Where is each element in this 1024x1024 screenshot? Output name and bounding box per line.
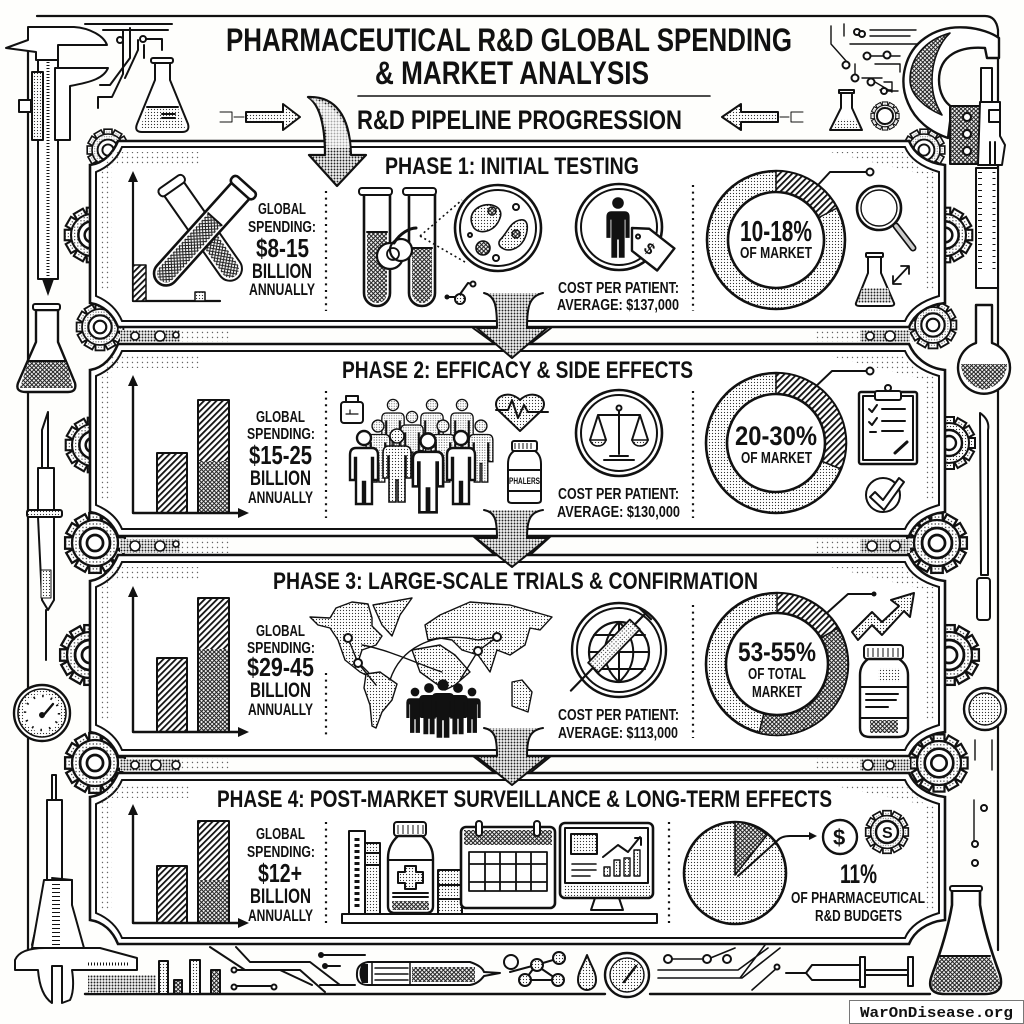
dotted bands between panels [120,329,915,771]
title [226,22,792,91]
arrow: small left [722,104,803,130]
text: phase 2 global spending [247,409,315,507]
text: phase 4 global spending: GLOBAL [256,826,305,843]
text: phase 1 cost per patient: AVERAGE: $137,000 [557,297,679,314]
watermark [850,1000,1024,1024]
icon: gear with S [866,811,908,853]
icon: magnifying glass [857,186,913,248]
icon: molecule [444,282,476,304]
text: phase 1 global spending: SPENDING: [248,219,316,236]
panel: Phase 2 [90,344,945,536]
bottom strip: pen [357,962,500,985]
icon: flask top left [136,58,188,132]
bottom strip: circuit lines [210,947,365,992]
panel: Phase 3 [90,555,945,756]
icon: medicine bottle: PHALERS [509,476,540,487]
icon: small pill bottle [341,396,363,423]
icon: books [349,831,380,915]
chart: phase 2 donut 20-30%: OF MARKET [741,450,812,467]
text: phase 4 global spending: $12+ [258,858,302,888]
text: phase 3 global spending [247,623,315,719]
shelf [342,914,657,923]
icon: syringe left [27,412,62,660]
text: phase 4 global spending: SPENDING: [247,844,315,861]
icon: group of people [350,399,493,512]
chart: phase 3 donut 53-55% [706,592,876,735]
text: phase 2 cost per patient: COST PER PATIENT: [558,486,679,503]
icon: small flask top right [830,90,862,130]
chart: phase 1 axes and crossed tubes [128,171,257,301]
icon: petri dish [455,185,541,271]
icon: stacked books [438,870,462,914]
chart: phase 2 donut 20-30%: 20-30% [735,421,817,451]
icon: small flask phase 1 [856,253,909,306]
gears behind panels [60,129,979,793]
chart: phase 3 donut 53-55%: OF TOTAL [748,666,806,683]
text: phase 4 global spending [247,826,315,925]
text: phase 2 global spending: GLOBAL [256,409,305,426]
text: phase 1 cost per patient [557,280,679,314]
text: phase 4 global spending: ANNUALLY [248,907,313,925]
heading: phase 4: PHASE 4: POST-MARKET SURVEILLANCE & LONG-TERM EFFECTS [217,786,832,813]
icon: dollar coin [823,820,857,854]
icon: medicine bottle [508,441,541,503]
chart: phase 4 bars [128,804,249,928]
text: phase 3 global spending: GLOBAL [256,623,305,640]
text: phase 2 cost per patient: AVERAGE: $130,000 [557,504,680,521]
title: & MARKET ANALYSIS [375,55,649,91]
icon: check mark circle [866,478,904,512]
bottom strip: drop [578,955,596,990]
chart: phase 1 donut 10-18%: OF MARKET [740,245,812,262]
subtitle: R&D PIPELINE PROGRESSION [357,105,682,135]
icon: heart with pulse [496,395,548,431]
icon: patient with price tag: $ [640,240,658,259]
bottom strip: syringe [786,957,913,987]
icon: test tubes with knot [359,188,465,306]
text: 11% of pharmaceutical R&D budgets: 11% [840,859,877,889]
icon: flask left [17,304,75,392]
text: phase 2 cost per patient [557,486,680,521]
text: phase 2 global spending: ANNUALLY [248,489,313,507]
icon: small gear top right [871,102,899,130]
text: phase 3 global spending: SPENDING: [247,640,315,657]
icon: growth arrow [852,593,914,640]
text: phase 2 global spending: BILLION [250,467,311,490]
icon: gauge right [964,688,1006,730]
heading: phase 3: PHASE 3: LARGE-SCALE TRIALS & CONFIRMATION [273,568,758,595]
icon: clipboard [859,385,917,464]
icon: gear with S: S [882,825,893,842]
icon: caliper top left [6,27,108,296]
chart: phase 1 donut 10-18%: 10-18% [740,216,812,248]
icon: computer monitor [560,823,653,910]
icon: globe with syringe [565,603,666,697]
panel: Phase 1 [90,141,945,327]
heading: phase 2: PHASE 2: EFFICACY & SIDE EFFECTS [342,357,693,384]
text: 11% of pharmaceutical R&D budgets [791,859,925,925]
chart: phase 3 donut 53-55%: MARKET [752,684,802,701]
arrow: phase 2 to phase 3 [473,510,551,567]
chart: phase 2 bars [128,375,249,518]
text: phase 1 global spending [248,201,316,299]
watermark: WarOnDisease.org [860,1005,1013,1022]
icon: patient with price tag [576,184,674,271]
icon: gauge left [14,685,70,741]
icon: calendar [461,821,555,908]
icon: micrometer [903,27,1005,288]
heading: phase 1: PHASE 1: INITIAL TESTING [385,153,639,180]
icon: scalpel right [977,397,998,695]
icon: dollar coin: $ [833,825,845,850]
text: phase 1 global spending: BILLION [252,260,312,283]
icon: large medicine bottle [860,645,908,737]
text: phase 1 global spending: ANNUALLY [249,281,315,299]
text: phase 1 global spending: $8-15 [256,233,309,263]
arrow: small right [220,104,300,130]
chart: phase 3 bars [128,586,249,737]
bottom strip: circuit lines right [658,945,780,990]
arrow: phase 3 to phase 4 [473,728,551,785]
icon: round flask right [958,305,1010,394]
chart: phase 1 donut 10-18% [707,168,874,309]
text: phase 1 global spending: GLOBAL [258,201,306,218]
text: phase 2 global spending: $15-25 [249,440,312,470]
panel: Phase 4 [90,773,945,944]
arrow: curved pipeline arrow [308,97,366,186]
icon: circuit lines right [972,740,998,950]
text: 11% of pharmaceutical R&D budgets: OF PHARMACEUTICAL [791,890,925,907]
text: phase 3 global spending: $29-45 [247,652,314,682]
bottom strip: gauge [605,953,649,997]
icon: caliper bottom left [15,775,137,1003]
world map [310,598,552,738]
title: PHARMACEUTICAL R&D GLOBAL SPENDING [226,22,792,58]
chart: phase 2 donut 20-30% [706,368,874,513]
circuit lines top right [831,24,918,94]
text: phase 2 global spending: SPENDING: [247,426,315,443]
text: phase 3 cost per patient: AVERAGE: $113,000 [558,725,678,742]
icon: bottle with cross [388,822,433,913]
chart: phase 4 pie [684,822,817,924]
bottom strip: molecule network [504,952,565,986]
text: phase 3 cost per patient [558,707,679,742]
circuit lines top left [85,24,172,108]
text: phase 3 global spending: BILLION [250,679,311,702]
text: phase 3 global spending: ANNUALLY [248,701,313,719]
text: phase 3 cost per patient: COST PER PATIENT: [558,707,679,724]
arrow: phase 1 to phase 2 [473,293,551,358]
text: phase 4 global spending: BILLION [250,885,311,908]
bottom strip: mini bars [88,960,220,994]
chart: phase 3 donut 53-55%: 53-55% [738,637,816,667]
text: 11% of pharmaceutical R&D budgets: R&D BUDGETS [815,908,902,925]
icon: balance scale [576,390,662,476]
icon: large flask bottom right [930,886,1001,994]
text: phase 1 cost per patient: COST PER PATIENT: [558,280,679,297]
